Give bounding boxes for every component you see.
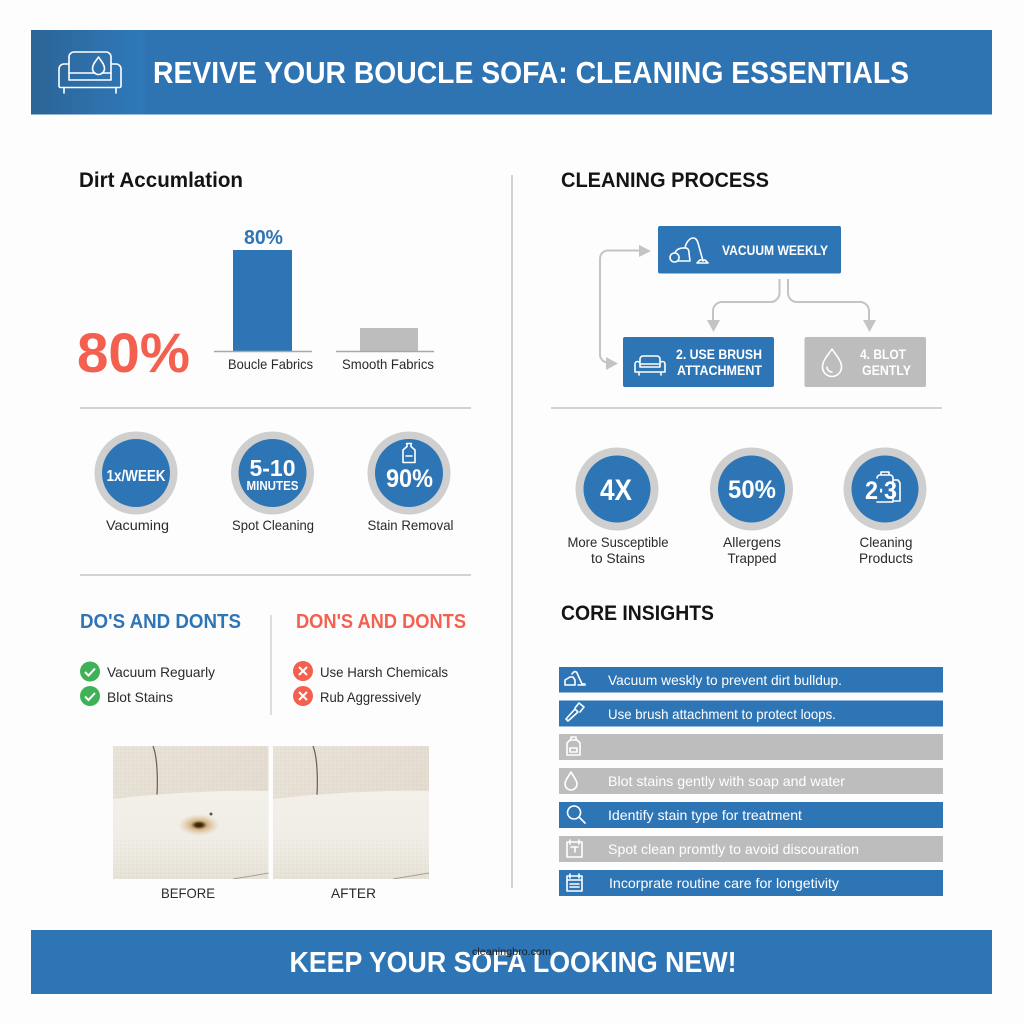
footer banner <box>31 930 992 994</box>
panel: cleaning process <box>561 169 926 387</box>
photo: after <box>273 746 429 879</box>
stat: 4x: 4X <box>600 474 632 507</box>
arrows <box>600 245 876 370</box>
stat: spot cleaning: Spot Cleaning <box>232 517 314 533</box>
stat: 2-3 cleaning products: · <box>879 477 884 505</box>
step: blot gently: GENTLY <box>862 362 912 378</box>
panel: dirt accumulation <box>77 169 434 384</box>
header banner <box>31 30 992 114</box>
row: empty product row <box>559 734 943 760</box>
row: vacuum weekly: Vacuum weskly to prevent dirt bulldup. <box>608 672 842 688</box>
stat: 50% <box>710 448 793 566</box>
stat: spot cleaning: MINUTES <box>246 478 299 493</box>
row: blot stains: Blot stains gently with soap and water <box>608 773 845 789</box>
step: use brush attachment: ATTACHMENT <box>677 362 762 378</box>
step: use brush attachment: 2. USE BRUSH <box>676 346 762 362</box>
big stat: 80%: 80% <box>77 321 190 384</box>
heading: core insights: CORE INSIGHTS <box>561 602 714 625</box>
stat: 2-3 cleaning products: 3 <box>884 477 897 505</box>
panel: do's and don'ts <box>80 611 466 715</box>
row: spot clean: Spot clean promtly to avoid discouration <box>608 841 859 857</box>
row: brush attachment: Use brush attachment to protect loops. <box>608 706 836 722</box>
before and after photos <box>113 746 429 901</box>
row: vacuum weekly <box>559 667 943 692</box>
stat: 50%: 50% <box>728 476 776 504</box>
panel: core insights <box>559 602 943 896</box>
list: don'ts: Rub Aggressively <box>320 689 421 705</box>
stat: vacuuming <box>94 432 178 533</box>
step: vacuum weekly: VACUUM WEEKLY <box>722 242 829 258</box>
row: identify stain <box>559 802 943 828</box>
row: blot stains <box>559 768 943 794</box>
photo: before <box>113 746 269 879</box>
row: brush attachment <box>559 700 943 726</box>
list: do's: Vacuum Reguarly <box>107 664 215 680</box>
panel: frequency stats <box>94 432 454 533</box>
row: identify stain: Identify stain type for treatment <box>608 807 802 823</box>
icon: sofa with water drop <box>59 52 121 93</box>
bar chart: Boucle Fabrics <box>228 356 313 372</box>
row: routine care: Incorprate routine care for longetivity <box>609 875 839 891</box>
footer slogan: KEEP YOUR SOFA LOOKING NEW! <box>290 947 736 979</box>
bar chart <box>214 227 434 372</box>
stat: 2-3 cleaning products <box>844 448 926 566</box>
panel: key statistics <box>568 448 926 566</box>
stat: 2-3 cleaning products: 2 <box>865 477 878 505</box>
stat: stain removal: Stain Removal <box>368 517 454 533</box>
stat: 50%: Allergens <box>723 534 781 550</box>
stat: 4x: More Susceptible <box>568 534 669 550</box>
list: do's <box>80 662 215 706</box>
heading: cleaning process: CLEANING PROCESS <box>561 169 769 192</box>
stat: spot cleaning <box>231 432 314 533</box>
stat: 2-3 cleaning products: Products <box>859 550 913 566</box>
bar chart: 80% <box>244 227 283 249</box>
step: use brush attachment <box>623 337 774 387</box>
list: do's: Blot Stains <box>107 689 173 705</box>
title: REVIVE YOUR BOUCLE SOFA: CLEANING ESSENTIALS <box>153 55 909 90</box>
stat: 50%: Trapped <box>728 550 776 566</box>
list: don'ts: Use Harsh Chemicals <box>320 664 448 680</box>
step: blot gently: 4. BLOT <box>860 346 906 362</box>
stat: stain removal <box>368 432 454 533</box>
step: vacuum weekly <box>658 226 841 274</box>
stat: vacuuming: Vacuming <box>106 517 169 533</box>
heading: don'ts: DON'S AND DONTS <box>296 611 466 633</box>
stat: stain removal: 90% <box>386 465 433 493</box>
stat: spot cleaning: 5-10 <box>250 455 296 481</box>
row: routine care <box>559 870 943 896</box>
caption: before: BEFORE <box>161 885 215 901</box>
stat: 4x: to Stains <box>591 550 645 566</box>
bar chart: Smooth Fabrics <box>342 356 434 372</box>
watermark: cleaningbro.com <box>472 947 551 958</box>
row: spot clean <box>559 836 943 862</box>
caption: after: AFTER <box>331 885 376 901</box>
heading: do's: DO'S AND DONTS <box>80 611 241 633</box>
list: don'ts <box>293 661 448 706</box>
stat: 4x <box>568 448 669 566</box>
heading: dirt accumulation: Dirt Accumlation <box>79 169 243 192</box>
stat: 2-3 cleaning products: Cleaning <box>860 534 912 550</box>
stat: vacuuming: 1x/WEEK <box>106 468 166 485</box>
step: blot gently <box>804 337 926 387</box>
